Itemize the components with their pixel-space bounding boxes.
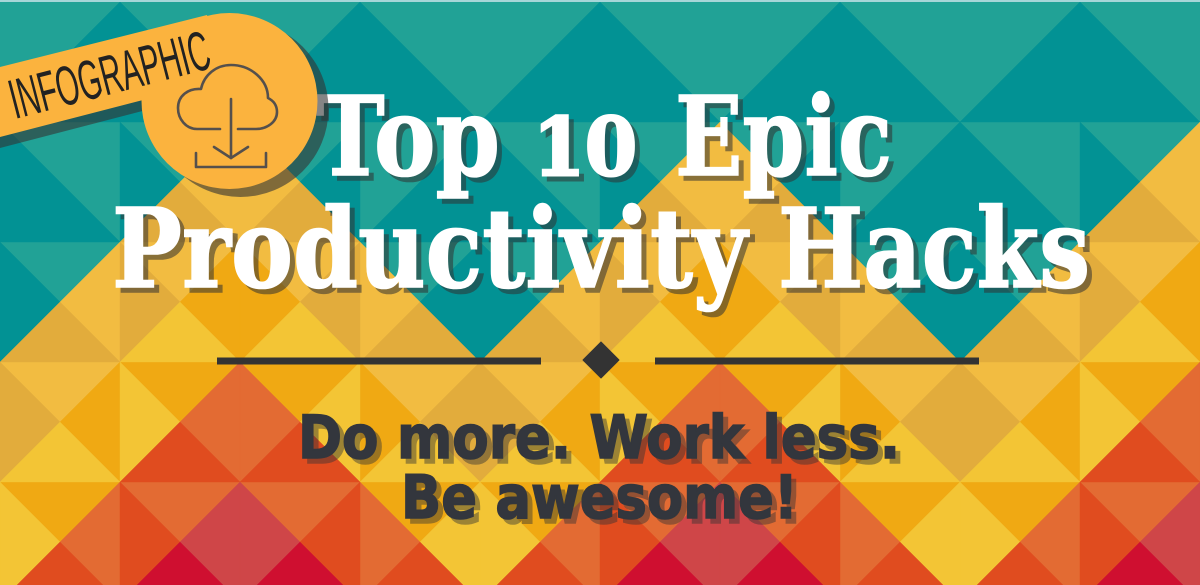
banner ribbon	[0, 15, 230, 137]
subtitle: Be awesome!	[401, 463, 798, 533]
divider with diamond	[217, 342, 979, 378]
badge shadow	[0, 21, 328, 197]
icon: cloud download	[178, 65, 277, 167]
title: Top	[316, 72, 500, 201]
subtitle: Do more. Work less.	[298, 403, 900, 473]
badge circle	[142, 13, 318, 189]
title: Productivity	[112, 184, 750, 313]
subtitle	[298, 403, 900, 533]
title: 10	[533, 100, 637, 194]
badge: banner and circle with shadow	[0, 13, 328, 197]
title	[112, 72, 1090, 313]
title: Epic	[675, 72, 892, 201]
title: Hacks	[778, 184, 1090, 313]
